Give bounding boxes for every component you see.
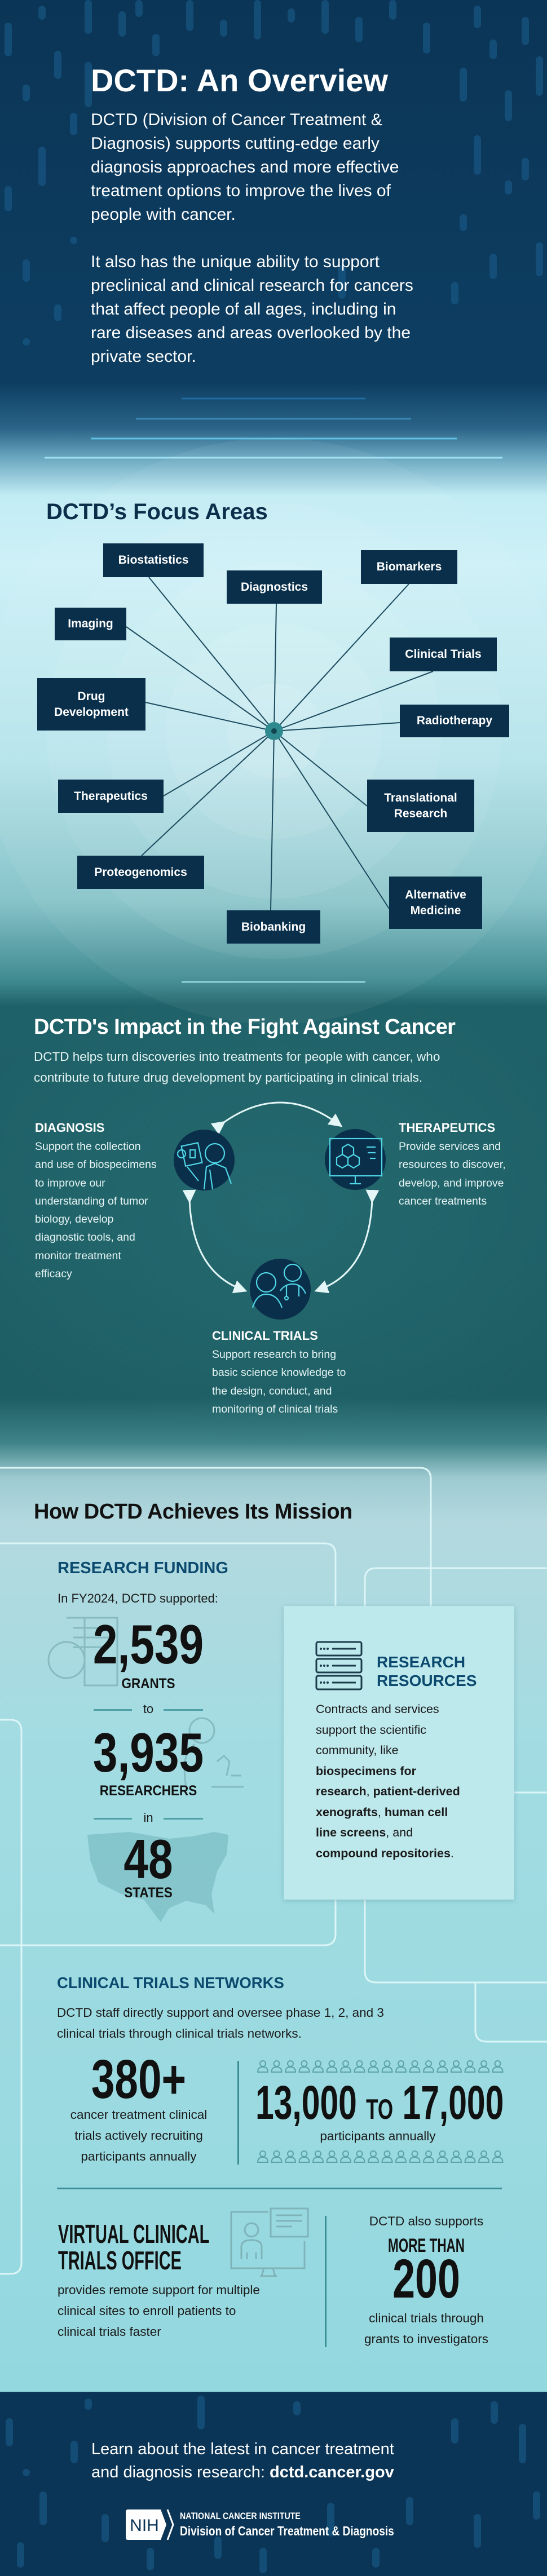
heading: Clinical Trials Networks: CLINICAL TRIALS NETWORKS: [57, 1974, 284, 1991]
text: resources description: [316, 1702, 460, 1860]
box: Radiotherapy: Radiotherapy: [417, 714, 492, 727]
text: virtual office description: provides remote support for multiple: [58, 2283, 260, 2297]
block: Clinical Trials: Support research to bring: [212, 1348, 336, 1361]
text: networks description: DCTD staff directly support and oversee phase 1, 2, and 3: [57, 2006, 384, 2020]
intro text: that affect people of all ages, including in: [91, 300, 396, 318]
intro text: DCTD (Division of Cancer Treatment &: [91, 110, 382, 129]
block: Clinical Trials: monitoring of clinical trials: [212, 1403, 338, 1415]
block: Diagnosis: to improve our: [35, 1177, 105, 1189]
stat: more than 200 trials: clinical trials through: [369, 2311, 484, 2325]
stat: 380+ trials: cancer treatment clinical: [70, 2108, 207, 2122]
panel: Research Resources: [284, 1606, 514, 1900]
impact subtitle: [34, 1050, 440, 1085]
block: Clinical Trials: the design, conduct, and: [212, 1385, 332, 1397]
intro text: treatment options to improve the lives of: [91, 182, 391, 200]
box: Imaging: Imaging: [68, 617, 113, 630]
impact subtitle: DCTD helps turn discoveries into treatments for people with cancer, who: [34, 1050, 440, 1064]
stat: 380+ trials: trials actively recruiting: [74, 2128, 203, 2143]
box: Drug Development: Development: [54, 706, 129, 718]
text: In FY2024: In FY2024, DCTD supported:: [58, 1591, 218, 1605]
box: Radiotherapy: [400, 705, 509, 737]
stat: 3,935 researchers: 3,935: [93, 1721, 204, 1783]
stat: more than 200 trials: DCTD also supports: [369, 2214, 483, 2228]
heading: Research Resources: RESEARCH: [377, 1653, 465, 1671]
text: resources description: support the scientific: [316, 1723, 426, 1736]
box: Diagnostics: [227, 570, 322, 604]
icon: diagnosis: [174, 1130, 235, 1190]
intro text: It also has the unique ability to support: [91, 253, 380, 271]
text: resources description: xenografts, human cell: [316, 1805, 448, 1818]
footer text: Learn about the latest in cancer treatment: [91, 2440, 394, 2458]
box: Biomarkers: [361, 550, 457, 584]
footer logo: NIH: [130, 2516, 159, 2535]
box: Alternative Medicine: [389, 877, 482, 929]
stat: 48 states: 48: [123, 1828, 173, 1890]
text: virtual office description: clinical sites to enroll patients to: [58, 2304, 236, 2318]
faded icons: grants, researcher, US map: [47, 1617, 244, 1922]
box: Translational Research: Translational: [384, 791, 457, 804]
footer text: and diagnosis research: dctd.cancer.gov: [91, 2463, 394, 2481]
icon: server: [316, 1641, 362, 1690]
connector: to: [94, 1702, 203, 1716]
text: resources description: research, patient-derived: [316, 1785, 460, 1798]
heading: Research Funding: RESEARCH FUNDING: [58, 1559, 228, 1577]
text: virtual office description: [58, 2283, 260, 2339]
box: Therapeutics: [58, 780, 164, 813]
text: networks description: [57, 2006, 384, 2041]
text: resources description: compound repositories.: [316, 1847, 454, 1860]
stat: 48 states: STATES: [124, 1885, 173, 1901]
block: Diagnosis: DIAGNOSIS: [35, 1121, 104, 1135]
intro text: private sector.: [91, 347, 196, 366]
heading: Virtual Clinical Trials Office: [58, 2219, 209, 2275]
box: Diagnostics: Diagnostics: [241, 581, 308, 593]
panel: Research Funding: [58, 1559, 228, 1605]
intro text: Diagnosis) supports cutting-edge early: [91, 134, 380, 153]
intro text: [91, 110, 413, 366]
box: Biomarkers: Biomarkers: [377, 560, 442, 573]
stat: more than 200 trials: MORE THAN: [388, 2235, 465, 2256]
footer logo: Division of Cancer Treatment & Diagnosis: [180, 2524, 394, 2538]
stat: 380+ trials: 380+: [91, 2048, 186, 2110]
box: Alternative Medicine: Medicine: [411, 904, 461, 917]
block: Clinical Trials: [212, 1329, 346, 1415]
stat: 13,000 to 17,000 participants: participants annually: [320, 2129, 436, 2143]
block: Therapeutics: develop, and improve: [399, 1177, 504, 1189]
box: Biostatistics: [103, 543, 204, 577]
block: Clinical Trials: CLINICAL TRIALS: [212, 1329, 318, 1343]
block: Diagnosis: [35, 1121, 157, 1280]
stat: 380+ trials: participants annually: [81, 2149, 197, 2163]
stat: more than 200 trials: [364, 2214, 488, 2346]
text: resources description: biospecimens for: [316, 1764, 416, 1778]
stat: more than 200 trials: 200: [392, 2248, 460, 2309]
block: Diagnosis: biology, develop: [35, 1213, 114, 1225]
footer text: [91, 2440, 394, 2481]
block: Diagnosis: and use of biospecimens: [35, 1158, 157, 1171]
block: Therapeutics: [399, 1121, 506, 1207]
box: Biobanking: [227, 910, 320, 944]
focus area hub diagram: [126, 577, 433, 910]
icon: monitor with person: [230, 2207, 309, 2277]
cycle diagram with arrows and icons: [174, 1101, 386, 1320]
icon: clinical trials: [250, 1259, 311, 1320]
footer logo: [126, 2509, 394, 2540]
box: Translational Research: [367, 780, 474, 832]
block: Therapeutics: resources to discover,: [399, 1158, 506, 1171]
text: virtual office description: clinical trials faster: [58, 2325, 161, 2339]
block: Diagnosis: Support the collection: [35, 1140, 141, 1153]
heading: Research Resources: RESOURCES: [377, 1672, 477, 1689]
block: Therapeutics: cancer treatments: [399, 1195, 487, 1207]
intro text: diagnosis approaches and more effective: [91, 158, 399, 176]
intro text: people with cancer.: [91, 205, 236, 224]
box: Translational Research: Research: [394, 807, 447, 820]
stat: 13,000 to 17,000 participants: 13,000 TO 17,000: [255, 2076, 504, 2129]
icon: therapeutics: [325, 1129, 386, 1190]
box: Alternative Medicine: Alternative: [405, 888, 466, 901]
heading: Research Resources: [377, 1653, 477, 1689]
stat: more than 200 trials: grants to investigators: [364, 2332, 488, 2346]
box: Biobanking: Biobanking: [241, 920, 306, 933]
text: resources description: line screens, and: [316, 1826, 413, 1839]
box: Drug Development: [37, 678, 145, 731]
box: Clinical Trials: [390, 638, 497, 671]
intro text: preclinical and clinical research for cancers: [91, 276, 413, 295]
block: Diagnosis: monitor treatment: [35, 1250, 121, 1262]
box: Proteogenomics: [77, 856, 204, 889]
block: Diagnosis: diagnostic tools, and: [35, 1231, 135, 1243]
heading: How DCTD Achieves Its Mission: How DCTD Achieves Its Mission: [34, 1500, 352, 1524]
box: Biostatistics: Biostatistics: [118, 554, 188, 566]
heading: Virtual Clinical Trials Office: TRIALS OFFICE: [58, 2246, 182, 2275]
connector: in: [94, 1811, 203, 1825]
connector: to: to: [143, 1702, 153, 1716]
title: DCTD An Overview: DCTD: An Overview: [91, 63, 388, 98]
heading: Impact: DCTD's Impact in the Fight Against Cancer: [34, 1015, 455, 1039]
impact subtitle: contribute to future drug development by participating in clinical trials.: [34, 1070, 422, 1085]
block: Clinical Trials: basic science knowledge to: [212, 1366, 346, 1379]
heading: Virtual Clinical Trials Office: VIRTUAL CLINICAL: [58, 2219, 209, 2249]
text: networks description: clinical trials through clinical trials networks.: [57, 2026, 302, 2041]
stat: 380+ trials: [70, 2048, 207, 2163]
box: Drug Development: Drug: [78, 690, 105, 702]
intro text: rare diseases and areas overlooked by the: [91, 324, 411, 342]
stat: 2,539 grants: 2,539: [93, 1613, 204, 1675]
block: Therapeutics: Provide services and: [399, 1140, 501, 1153]
people icon rows: [257, 2060, 503, 2163]
text: resources description: community, like: [316, 1743, 399, 1757]
block: Diagnosis: understanding of tumor: [35, 1195, 148, 1207]
stat: 2,539 grants: GRANTS: [121, 1676, 175, 1692]
text: resources description: Contracts and services: [316, 1702, 439, 1716]
stat: 3,935 researchers: RESEARCHERS: [100, 1783, 197, 1799]
box: Proteogenomics: Proteogenomics: [94, 866, 187, 878]
box: Clinical Trials: Clinical Trials: [405, 648, 482, 661]
heading: Focus Areas: DCTD’s Focus Areas: [46, 499, 268, 524]
block: Therapeutics: THERAPEUTICS: [399, 1121, 495, 1135]
box: Therapeutics: Therapeutics: [74, 789, 148, 803]
block: Diagnosis: efficacy: [35, 1268, 72, 1280]
footer logo: NATIONAL CANCER INSTITUTE: [180, 2511, 301, 2521]
box: Imaging: [55, 608, 126, 640]
connector: in: in: [143, 1811, 153, 1825]
